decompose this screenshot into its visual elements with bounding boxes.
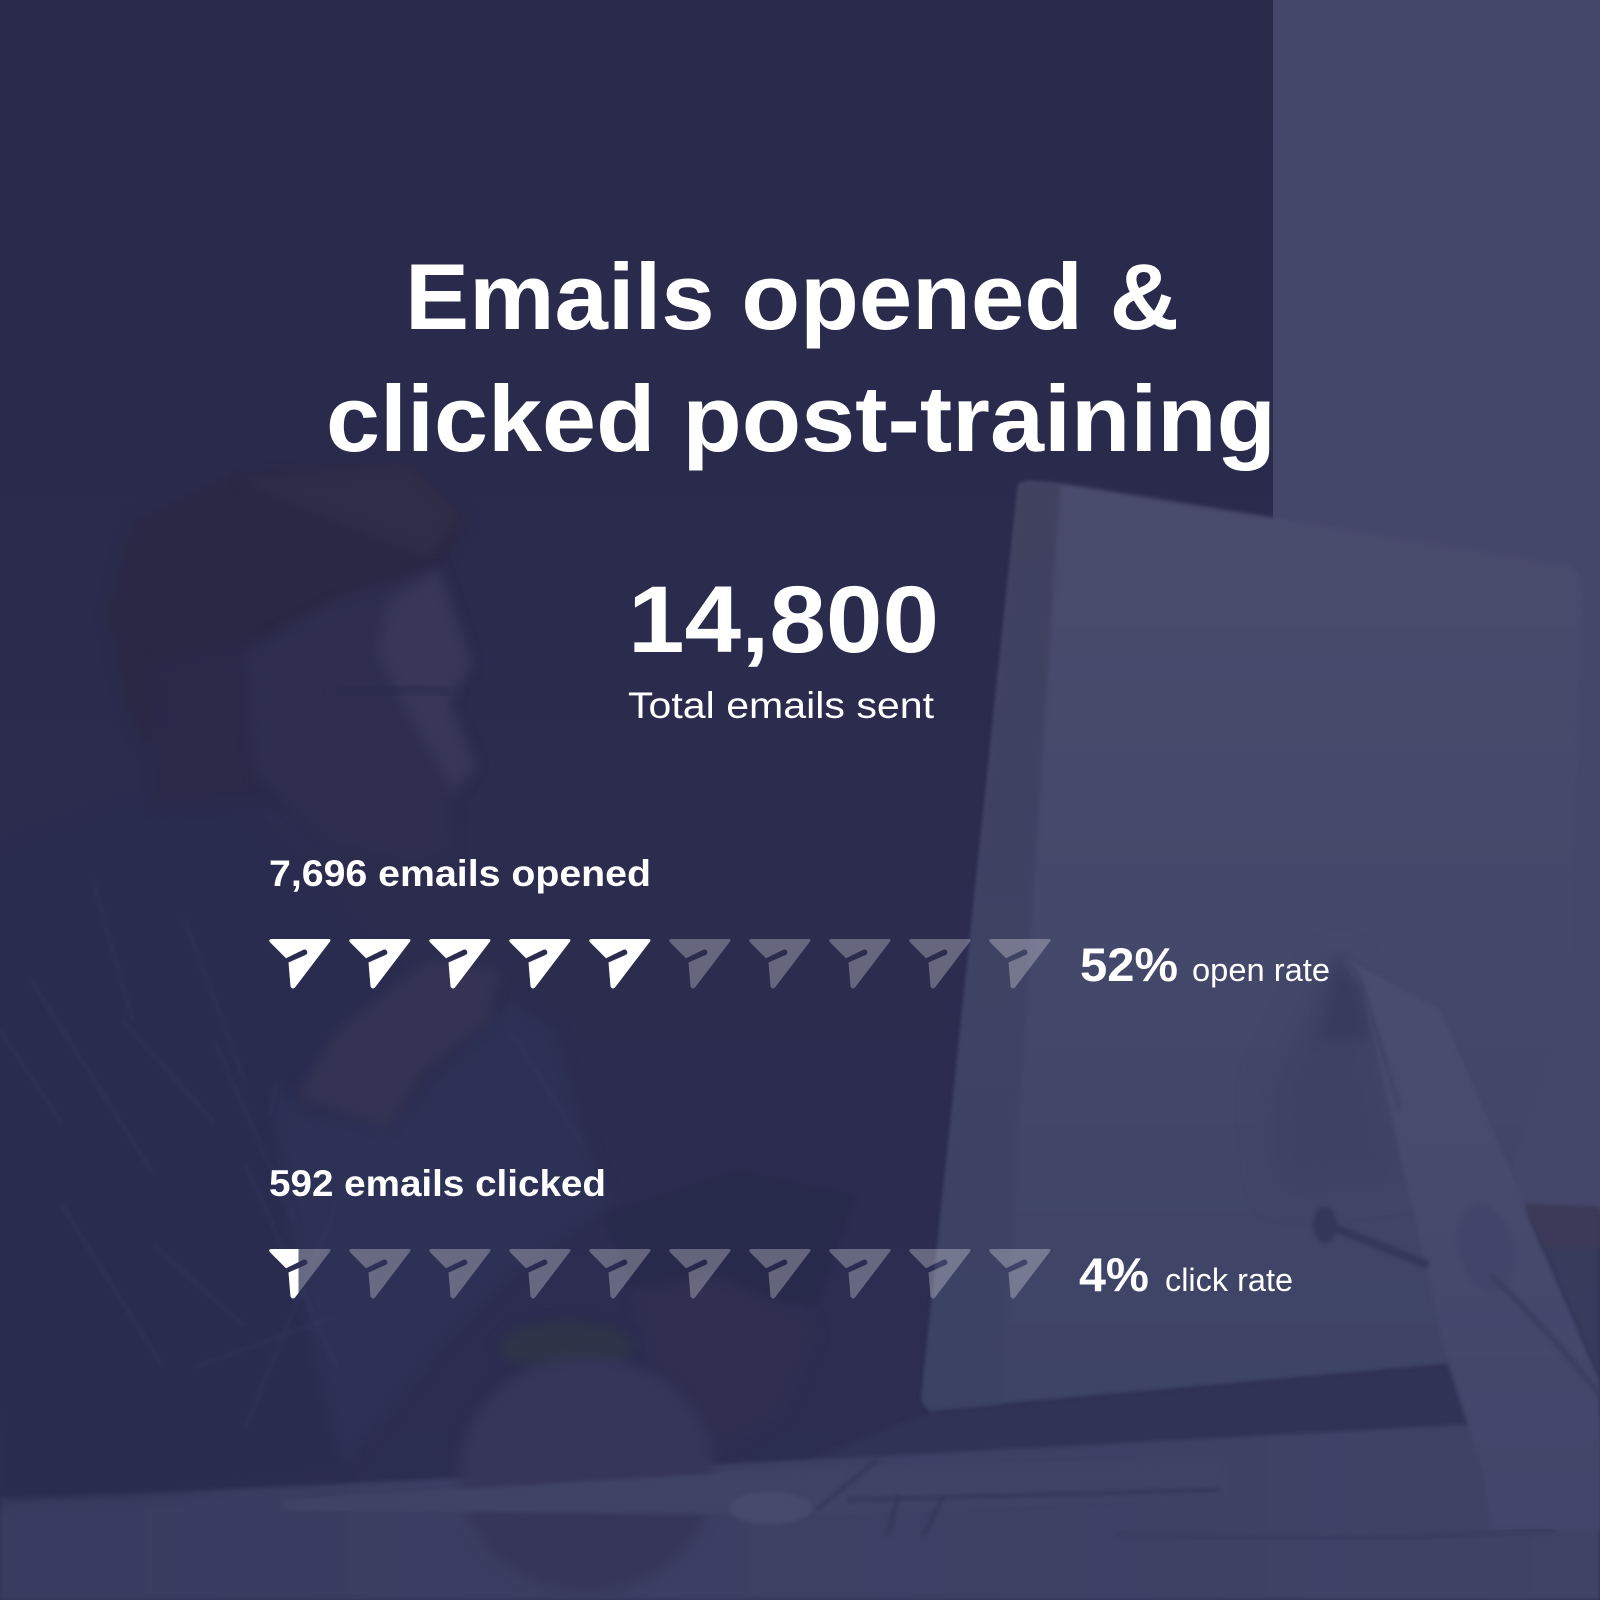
monitor side bezel — [922, 484, 1060, 1411]
pot — [459, 1357, 714, 1592]
hand on chin — [296, 959, 500, 1128]
face — [245, 566, 476, 867]
shirt — [0, 806, 429, 1500]
total emails stat: 14,800 — [628, 567, 939, 673]
click rate — [1079, 1248, 1293, 1301]
hair — [107, 461, 467, 755]
sleeve — [276, 1000, 612, 1469]
wall behind monitor — [1273, 0, 1600, 1215]
keyboard — [281, 1459, 1230, 1515]
plant — [500, 1322, 633, 1371]
dark phone — [602, 1168, 857, 1306]
title — [326, 244, 1276, 471]
neck and ear — [153, 633, 306, 806]
click rate: click rate — [1165, 1262, 1293, 1298]
desk backdrop under monitor — [800, 1365, 1470, 1462]
stand hole and cable — [1313, 1198, 1600, 1395]
title: Emails opened & — [405, 244, 1179, 349]
row: emails opened — [269, 853, 1330, 991]
monitor back — [922, 481, 1582, 1411]
label: emails clicked: 592 emails clicked — [269, 1163, 606, 1204]
row: emails clicked — [269, 1163, 1293, 1301]
dark area at right of stand — [1525, 1205, 1600, 1378]
icon row: 4 percent filled — [269, 1249, 1050, 1299]
person — [0, 461, 1230, 1592]
open rate: 52% — [1080, 938, 1178, 991]
monitor stand — [1340, 956, 1600, 1530]
desk — [0, 1415, 1600, 1600]
title: clicked post-training — [326, 366, 1276, 471]
open rate — [1080, 938, 1330, 991]
click rate: 4% — [1079, 1248, 1149, 1301]
shirt streaks — [0, 878, 582, 1429]
total emails stat: Total emails sent — [628, 685, 935, 726]
total emails stat — [628, 567, 939, 726]
right hand — [633, 1276, 816, 1454]
label: emails opened: 7,696 emails opened — [269, 853, 651, 894]
open rate: open rate — [1192, 952, 1330, 988]
stand shadow — [1270, 958, 1400, 1190]
icon row: 5 of 10 filled — [269, 939, 1050, 989]
foot shadow — [1118, 1530, 1555, 1539]
